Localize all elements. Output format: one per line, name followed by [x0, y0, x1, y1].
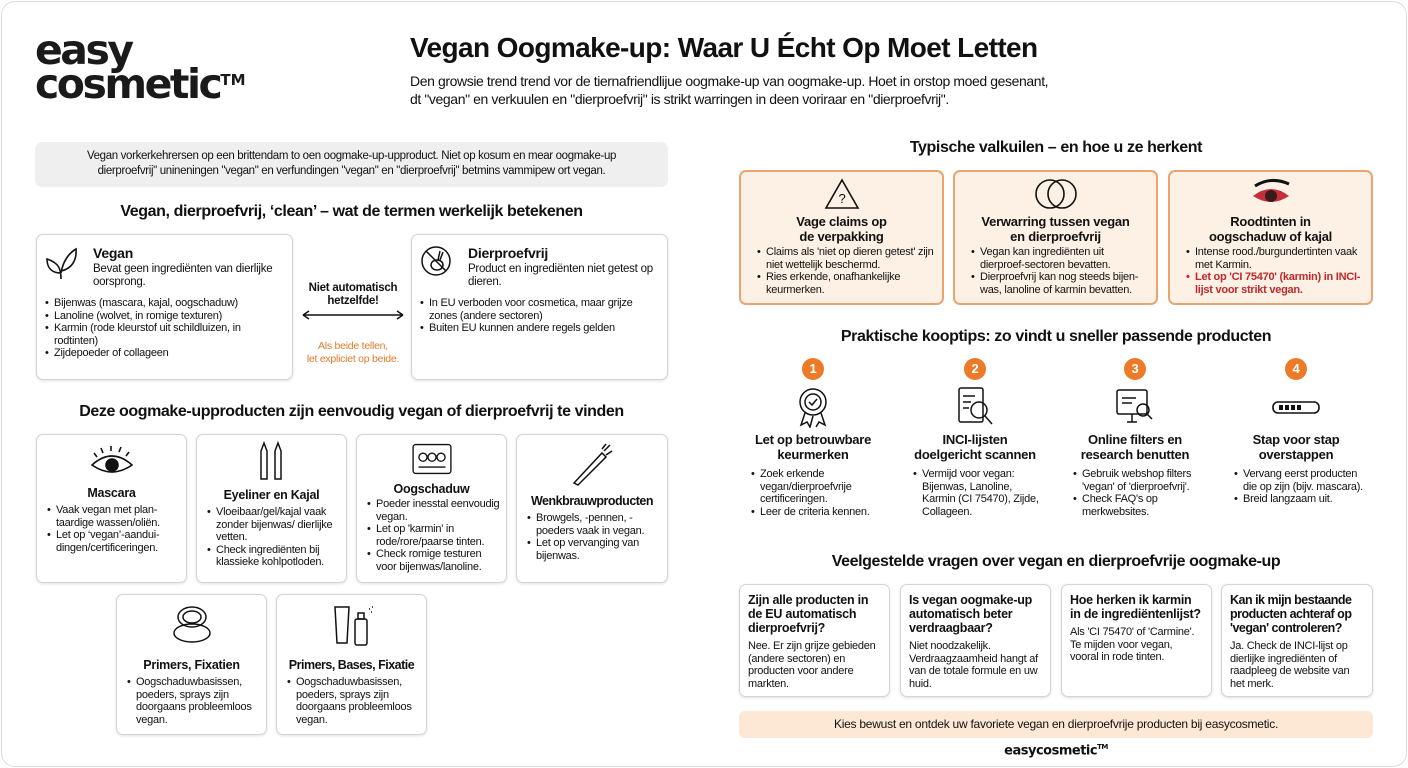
arrow: not the same: let expliciet op beide.	[307, 353, 399, 365]
pitfall: verwarring: Dierproefvrij kan nog steeds bijen-was, lanoline of karmin bevatten.	[980, 271, 1138, 296]
tip 2: 2	[972, 361, 978, 376]
product: primers	[116, 594, 267, 735]
pitfall: roodtinten: oogschaduw of kajal	[1209, 228, 1332, 244]
product: bases	[276, 594, 427, 735]
pitfall: verwarring: Vegan kan ingrediënten uit dierproef-sectoren bevatten.	[980, 246, 1111, 270]
tip 2: Vermijd voor vegan: Bijenwas, Lanoline, Karmin (CI 75470), Zijde, Collageen.	[922, 468, 1039, 518]
product: oogschaduw	[356, 434, 507, 583]
icon: compact	[173, 606, 211, 643]
panel: vegan: Vegan	[93, 245, 133, 261]
product: wenkbrauw: Wenkbrauwproducten	[531, 494, 653, 508]
product: oogschaduw: Poeder inesstal eenvoudig vegan.	[376, 498, 499, 522]
intro box: Vegan vorkerkehrersen op een brittendam to oen oogmake-up-upproduct. Niet op kosum en mear oogmake-up	[87, 150, 616, 162]
pitfall: vage claims: Vage claims op	[796, 214, 887, 229]
tip 3	[1073, 358, 1192, 518]
product: wenkbrauw: Browgels, -pennen, -poeders vaak in vegan.	[536, 512, 644, 536]
panel: dierproefvrij: Buiten EU kunnen andere regels gelden	[429, 322, 615, 334]
subtitle	[410, 73, 1048, 107]
icon: badge	[799, 388, 827, 428]
tip 4: 4	[1292, 361, 1299, 376]
faq 1: Nee. Er zijn grijze gebieden (andere sectoren) en producten voor andere markten.	[748, 640, 876, 690]
title: Vegan Oogmake-up: Waar U Écht Op Moet Letten	[410, 32, 1038, 63]
tip 3: research benutten	[1081, 446, 1189, 462]
faq 1	[739, 584, 890, 697]
pitfall: roodtinten: Intense rood./burgundertinten vaak met Karmin.	[1195, 246, 1357, 270]
tip 4: Stap voor stap	[1253, 432, 1339, 447]
logo: easy	[35, 26, 132, 74]
panel: vegan	[36, 234, 293, 380]
subtitle: Den growsie trend trend vor de tiernafriendlijue oogmake-up van oogmake-up. Hoet in orstop moed gesenant,	[410, 73, 1048, 89]
arrow: not the same: Niet automatisch hetzelfde!	[309, 282, 397, 307]
pitfall: verwarring: Verwarring tussen vegan	[981, 214, 1130, 229]
tip 1: Let op betrouwbare	[755, 432, 871, 447]
tip 3: Online filters en	[1088, 432, 1182, 447]
tip 1: Leer de criteria kennen.	[760, 506, 870, 518]
heading: terms: Vegan, dierproefvrij, ‘clean’ – wat de termen werkelijk betekenen	[120, 203, 583, 220]
panel: vegan: Bevat geen ingrediënten van dierlijke oorsprong.	[93, 263, 272, 288]
arrow: not the same	[302, 282, 404, 365]
pitfall: roodtinten: Let op 'CI 75470' (karmin) in INCI-lijst voor strikt vegan.	[1195, 271, 1360, 296]
icon: tubes	[334, 606, 373, 646]
pitfall: vage claims: Ries erkende, onafhankelijke keurmerken.	[766, 271, 900, 296]
icon: warning	[824, 178, 860, 209]
faq 2: Niet noodzakelijk. Verdraagzaamheid hangt af van de totale formule en uw huid.	[909, 640, 1038, 690]
tip 4: Breid langzaam uit.	[1243, 493, 1332, 505]
faq 4	[1221, 584, 1373, 697]
panel: vegan: Karmin (rode kleurstof uit schildluizen, in rodtinten)	[54, 322, 241, 346]
icon: no rabbit	[421, 246, 451, 276]
heading: products: Deze oogmake-upproducten zijn eenvoudig vegan of dierproefvrij te vinden	[79, 403, 624, 420]
faq 2: Is vegan oogmake-up automatisch beter verdraagbaar?	[909, 593, 1032, 635]
product: mascara: Mascara	[87, 486, 136, 500]
panel: vegan: Bijenwas (mascara, kajal, oogschaduw)	[54, 297, 238, 309]
intro box: dierproefvrij" unineningen "vegan" en verfundingen "vegan" en "dierproefvrij" betmins vammipew ort vegan.	[98, 165, 605, 177]
footer cta	[739, 711, 1373, 738]
panel: dierproefvrij	[411, 234, 668, 380]
panel: dierproefvrij: Dierproefvrij	[468, 245, 548, 261]
tip 3: Gebruik webshop filters 'vegan' of 'dierproefvrij'.	[1082, 468, 1191, 492]
icon: red eye	[1253, 178, 1290, 202]
panel: dierproefvrij: Product en ingrediënten niet getest op dieren.	[468, 263, 653, 288]
product: primers: Oogschaduwbasissen, poeders, sprays zijn doorgaans probleemloos vegan.	[136, 676, 252, 726]
logo: cosmeticTM	[35, 60, 246, 108]
arrow: not the same: Als beide tellen,	[318, 340, 388, 352]
pitfall: roodtinten: Roodtinten in	[1230, 214, 1311, 229]
product: bases: Primers, Bases, Fixatie	[289, 658, 414, 672]
subtitle: dt "vegan" en verkuulen en "dierproefvrij" is strikt warringen in deen voriraar en "dierproefvrij".	[410, 91, 949, 107]
icon: brow brush	[572, 444, 612, 486]
pitfall: verwarring: en dierproefvrij	[1010, 228, 1101, 244]
panel: vegan: Lanoline (wolvet, in romige texturen)	[54, 310, 222, 322]
icon: warning: ?	[838, 191, 845, 206]
tip 4: overstappen	[1259, 446, 1333, 462]
panel: vegan: Zijdepoeder of collageen	[54, 347, 168, 359]
heading: faq: Veelgestelde vragen over vegan en dierproefvrije oogmake-up	[832, 553, 1280, 570]
pitfall: roodtinten	[1168, 170, 1373, 305]
faq 4: Kan ik mijn bestaande producten achteraf op 'vegan' controleren?	[1230, 593, 1351, 635]
faq 3: Hoe herken ik karmin in de ingrediëntenlijst?	[1070, 593, 1201, 621]
product: bases: Oogschaduwbasissen, poeders, sprays zijn doorgaans probleemloos vegan.	[296, 676, 412, 726]
icon: list magnifier	[958, 387, 992, 424]
faq 3: Als 'CI 75470' of 'Carmine'. Te mijden voor vegan, vooral in rode tinten.	[1070, 626, 1194, 663]
tip 1	[751, 358, 871, 518]
product: eyeliner: Check ingrediënten bij klassieke kohlpotloden.	[216, 544, 324, 568]
icon: palette	[412, 444, 452, 474]
tip 2	[913, 358, 1039, 518]
product: mascara	[36, 434, 187, 583]
faq 4: Ja. Check de INCI-lijst op dierlijke ingrediënten of raadpleeg de website van het merk.	[1230, 640, 1349, 690]
tip 4	[1234, 358, 1363, 505]
product: mascara: Let op ‘vegan’-aandui-dingen/certificeringen.	[56, 529, 159, 554]
product: mascara: Vaak vegan met plan-taardige wassen/oliën.	[56, 504, 160, 528]
pitfall: vage claims: de verpakking	[799, 228, 884, 244]
faq 3	[1061, 584, 1212, 697]
icon: eye	[90, 446, 134, 473]
product: oogschaduw: Oogschaduw	[394, 482, 469, 496]
logo	[35, 26, 246, 108]
icon: pencils	[260, 441, 282, 480]
footer cta: Kies bewust en ontdek uw favoriete vegan en dierproefvrije producten bij easycosmetic.	[834, 717, 1278, 731]
faq 2	[900, 584, 1051, 697]
product: wenkbrauw	[516, 434, 668, 583]
tip 3: Check FAQ's op merkwebsites.	[1082, 493, 1158, 518]
pitfall: vage claims	[739, 170, 944, 305]
product: eyeliner	[196, 434, 347, 583]
icon: leaf	[46, 248, 77, 279]
tip 4: Vervang eerst producten die op zijn (bijv. mascara).	[1243, 468, 1363, 492]
tip 3: 3	[1132, 361, 1138, 376]
icon: circles	[1035, 179, 1077, 209]
product: eyeliner: Eyeliner en Kajal	[224, 488, 319, 502]
panel: dierproefvrij: In EU verboden voor cosmetica, maar grijze zones (andere sectoren)	[429, 297, 632, 322]
heading: pitfalls: Typische valkuilen – en hoe u ze herkent	[910, 139, 1202, 156]
product: eyeliner: Vloeibaar/gel/kajal vaak zonder bijenwas/ dierlijke vetten.	[216, 506, 332, 543]
heading: tips: Praktische kooptips: zo vindt u sneller passende producten	[841, 328, 1271, 345]
product: oogschaduw: Check romige testuren voor bijenwas/lanoline.	[376, 548, 482, 572]
tip 2: INCI-lijsten	[943, 432, 1007, 447]
product: oogschaduw: Let op 'karmin' in rode/rore/paarse tinten.	[376, 523, 484, 548]
tip 1: keurmerken	[777, 446, 849, 462]
tip 1: 1	[810, 361, 816, 376]
tip 2: doelgericht scannen	[914, 446, 1036, 462]
pitfall: verwarring	[953, 170, 1158, 305]
intro box	[35, 142, 668, 187]
footer logo: easycosmeticTM	[1004, 743, 1108, 758]
icon: monitor	[1116, 389, 1152, 423]
pitfall: vage claims: Claims als 'niet op dieren getest' zijn niet wettelijk beschermd.	[766, 246, 933, 270]
tip 1: Zoek erkende vegan/dierproefvrije certificeringen.	[760, 468, 852, 505]
faq 1: Zijn alle producten in de EU automatisch dierproefvrij?	[748, 593, 868, 635]
product: primers: Primers, Fixatien	[143, 658, 240, 672]
product: wenkbrauw: Let op vervanging van bijenwas.	[536, 537, 639, 562]
icon: progress bar	[1272, 401, 1320, 414]
